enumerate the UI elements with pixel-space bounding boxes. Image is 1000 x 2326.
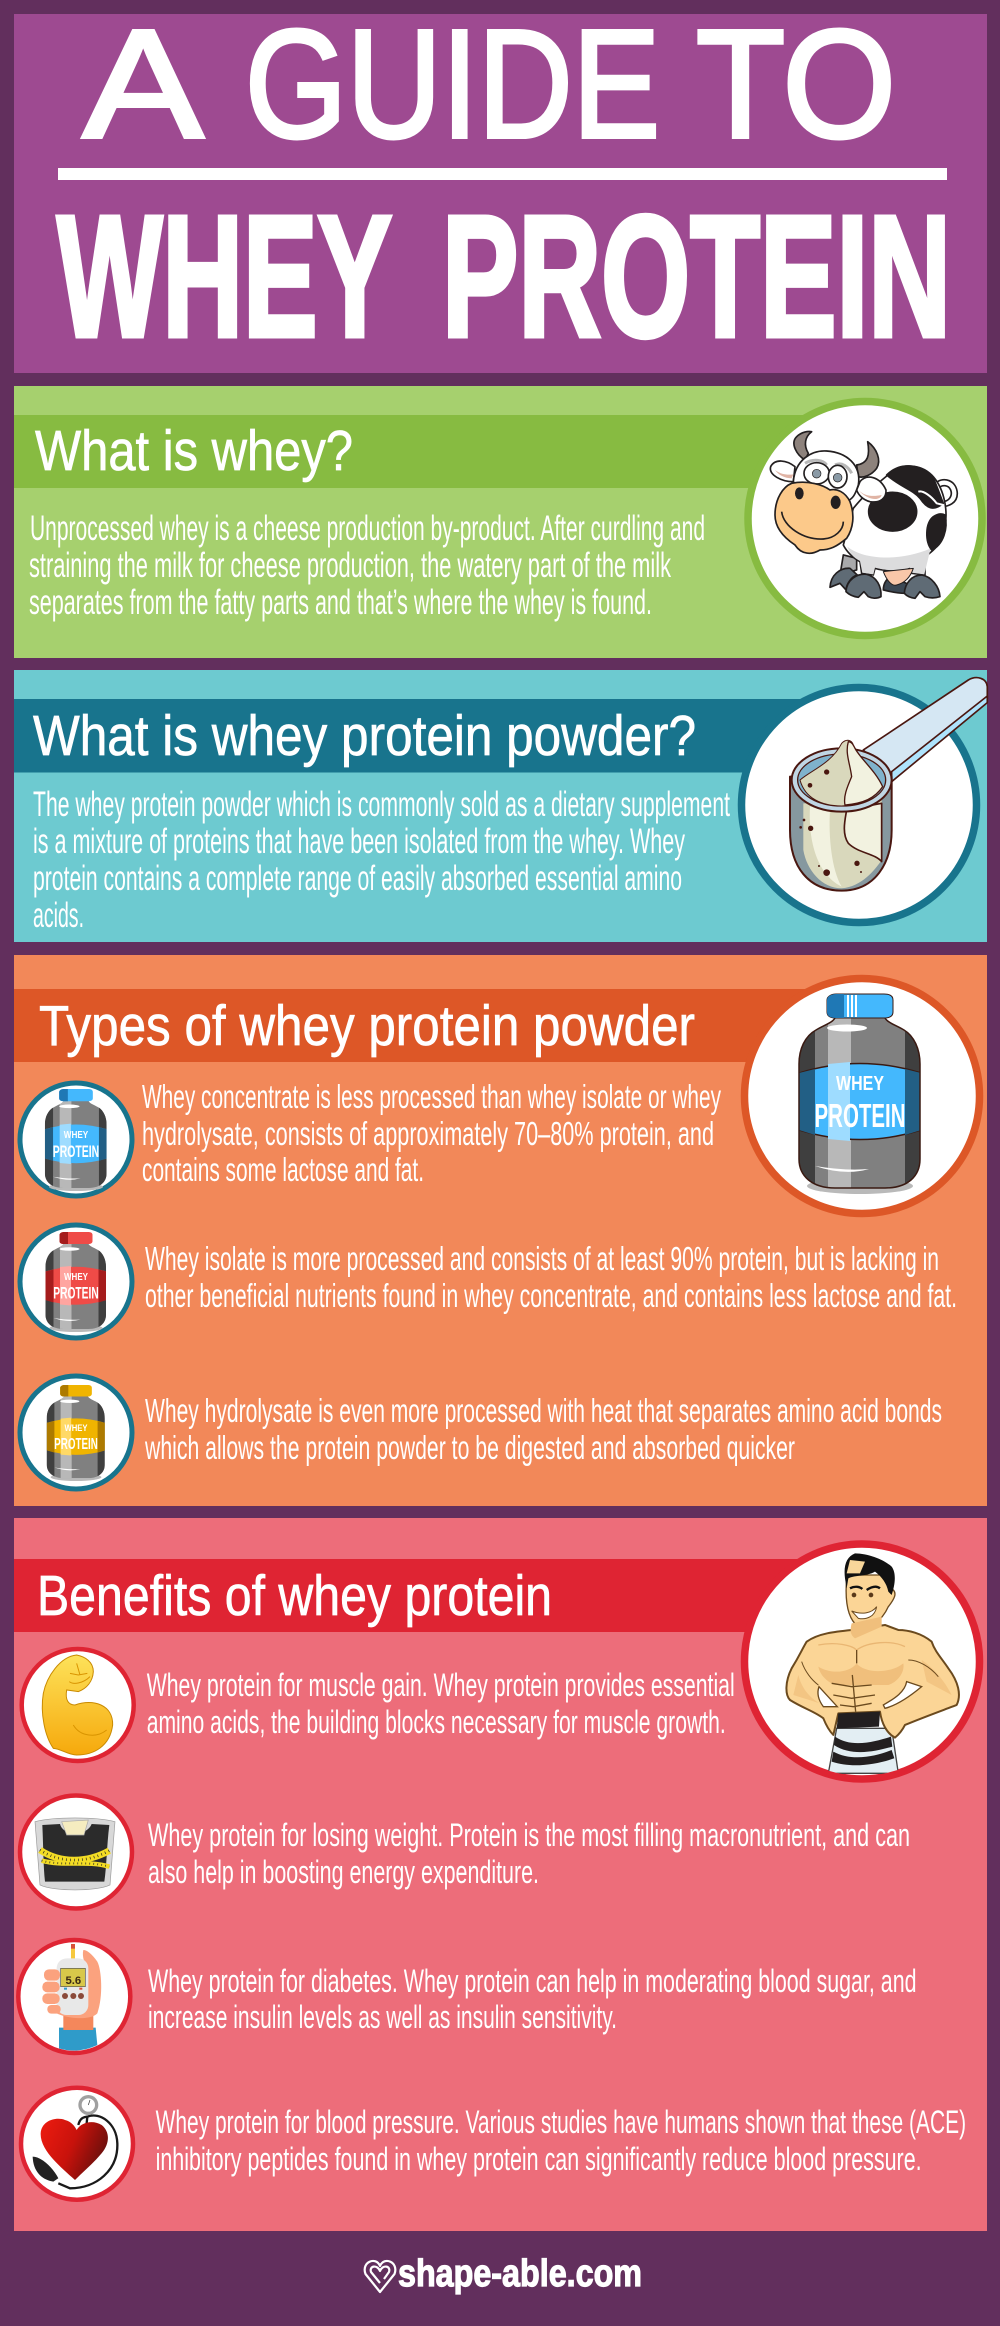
heading: what is whey protein powder: What is whey protein powder? [33,704,696,768]
text block: powder description [33,785,730,935]
text block: losing weight: also help in boosting energy expenditure. [148,1854,539,1890]
heading: benefits of whey protein: Benefits of whey protein [37,1564,552,1628]
icon: small blue bottle: PROTEIN [53,1142,99,1161]
icon: muscular man [744,1544,980,1779]
icon: cow [748,402,982,636]
panel: types of whey protein powder [14,955,987,1506]
icon: heart with blood pressure cuff [21,2088,133,2200]
heading: types of whey protein powder: Types of whey protein powder [39,994,695,1058]
icon: large blue bottle [744,978,980,1214]
title line: A GUIDE TO: TO [696,0,896,170]
icon: heart logo [365,2261,395,2292]
title line: WHEY PROTEIN: WHEY [57,179,392,373]
heading: what is whey: What is whey? [35,419,353,483]
text block: diabetes [148,1963,916,2035]
icon: flexed arm [22,1649,134,1761]
icon: large blue bottle: PROTEIN [814,1097,906,1134]
title line: A GUIDE TO: GUIDE [245,0,660,170]
panel: what is whey [14,386,987,658]
panel: benefits of whey protein [14,1518,987,2231]
text block: whey concentrate [142,1078,721,1188]
text block: whey hydrolysate [144,1392,942,1466]
text block: what is whey [29,509,705,622]
title line: WHEY PROTEIN [57,179,951,373]
panel: what is whey protein powder [14,670,987,942]
text block: whey concentrate: contains some lactose and fat. [142,1151,424,1188]
icon: glucose meter in hand [18,1940,130,2053]
footer: shape-able logo [365,2253,642,2295]
icon: bathroom scale with tape [20,1796,132,1908]
text block: whey concentrate: hydrolysate, consists of approximately 70–80% protein, and [142,1115,714,1152]
text block: whey isolate [145,1240,957,1314]
text block: muscle gain: amino acids, the building blocks necessary for muscle growth. [147,1704,726,1740]
title line: A GUIDE TO: A [83,0,203,170]
logo wordmark: shape-able.com [398,2253,642,2295]
title line: A GUIDE TO [83,0,896,170]
icon: small red bottle [20,1225,132,1338]
text block: muscle gain [147,1667,735,1740]
text block: powder description: acids. [33,896,84,935]
text block: diabetes: increase insulin levels as well as insulin sensitivity. [148,1999,617,2035]
icon: glucose meter in hand: 5.6 [65,1975,81,1987]
icon: small red bottle: WHEY [64,1272,88,1283]
icon: large blue bottle: WHEY [836,1073,885,1095]
title rule [58,168,947,180]
icon: small red bottle: PROTEIN [53,1284,99,1302]
icon: protein scoop [742,678,987,922]
icon: small yellow bottle: PROTEIN [54,1436,98,1453]
panel: title header [14,0,987,373]
icon: small blue bottle [20,1083,132,1196]
icon: small yellow bottle [20,1376,132,1489]
icon: small blue bottle: WHEY [64,1130,88,1141]
text block: blood pressure [156,2104,966,2177]
icon: small yellow bottle: WHEY [64,1423,88,1434]
text block: losing weight [148,1817,910,1890]
